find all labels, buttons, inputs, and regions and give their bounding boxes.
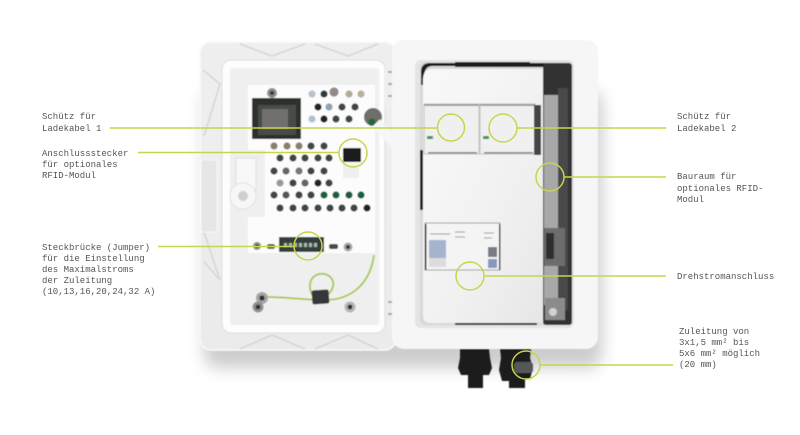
door ribs [203, 44, 378, 349]
callout: Schütz für Ladekabel 1: Ladekabel 1 [42, 124, 101, 134]
callout: Steckbrücke: des Maximalstroms [42, 265, 134, 275]
callout: Drehstromanschluss: Drehstromanschluss [677, 272, 774, 282]
callout: Anschlussstecker: RFID-Modul [42, 171, 96, 181]
ground screws [256, 292, 268, 304]
hinge [385, 66, 405, 314]
inner channel [420, 62, 572, 325]
callout: Steckbrücke: der Zuleitung [42, 276, 112, 286]
callout: Anschlussstecker: für optionales [42, 160, 118, 170]
callout: Anschlussstecker: Anschlussstecker [42, 149, 128, 159]
callout: Zuleitung: 3x1,5 mm² bis [679, 338, 749, 348]
cable grommet [364, 108, 382, 126]
callout: Zuleitung [512, 327, 760, 379]
bracket with round clip [236, 158, 256, 190]
callout: Schütz für Ladekabel 2: Schütz für [677, 112, 731, 122]
inner panel [230, 68, 379, 325]
transformer [252, 98, 301, 139]
callout: Drehstromanschluss [456, 262, 774, 290]
jumper board [279, 237, 324, 252]
left door [200, 42, 398, 350]
callout: Steckbrücke: Steckbrücke (Jumper) [42, 243, 150, 253]
right enclosure [392, 40, 598, 349]
callout: Zuleitung: (20 mm) [679, 360, 717, 370]
screw top [267, 88, 277, 98]
grey strip in channel [544, 95, 558, 305]
callout: Schütz für Ladekabel 1 [42, 112, 464, 141]
callout: Bauraum: Bauraum für [677, 172, 736, 182]
contactor 2 [480, 104, 541, 155]
contactor 1 [424, 104, 479, 154]
cable glands [458, 349, 533, 388]
callout: Anschlussstecker [42, 139, 367, 181]
callout: Steckbrücke: für die Einstellung [42, 254, 145, 264]
three-phase terminal module [425, 223, 500, 270]
callout: Bauraum [536, 163, 763, 205]
terminal block [544, 228, 565, 266]
left cable gland [458, 349, 492, 388]
callout: Steckbrücke: (10,13,16,20,24,32 A) [42, 287, 155, 297]
callout: Schütz für Ladekabel 2: Ladekabel 2 [677, 124, 736, 134]
callout: Schütz für Ladekabel 2 [489, 112, 736, 142]
earth wire [268, 255, 374, 300]
white mounting plate [423, 69, 543, 323]
callout: Steckbrücke [42, 232, 322, 297]
callout: Bauraum: optionales RFID- [677, 184, 763, 194]
ventilation holes [270, 87, 371, 212]
right cable gland [499, 349, 533, 388]
black seal segments [420, 62, 570, 325]
ferrite core [312, 289, 329, 305]
callout: Zuleitung: 5x6 mm² möglich [679, 349, 760, 359]
RFID connector [343, 148, 361, 162]
callout: Bauraum: Modul [677, 195, 704, 205]
callout: Zuleitung: Zuleitung von [679, 327, 749, 337]
wallbox open enclosure [200, 40, 598, 350]
inner frame [222, 60, 385, 333]
circuit board cover [248, 85, 375, 253]
device shadow [204, 90, 602, 368]
callout: Schütz für Ladekabel 1: Schütz für [42, 112, 96, 122]
